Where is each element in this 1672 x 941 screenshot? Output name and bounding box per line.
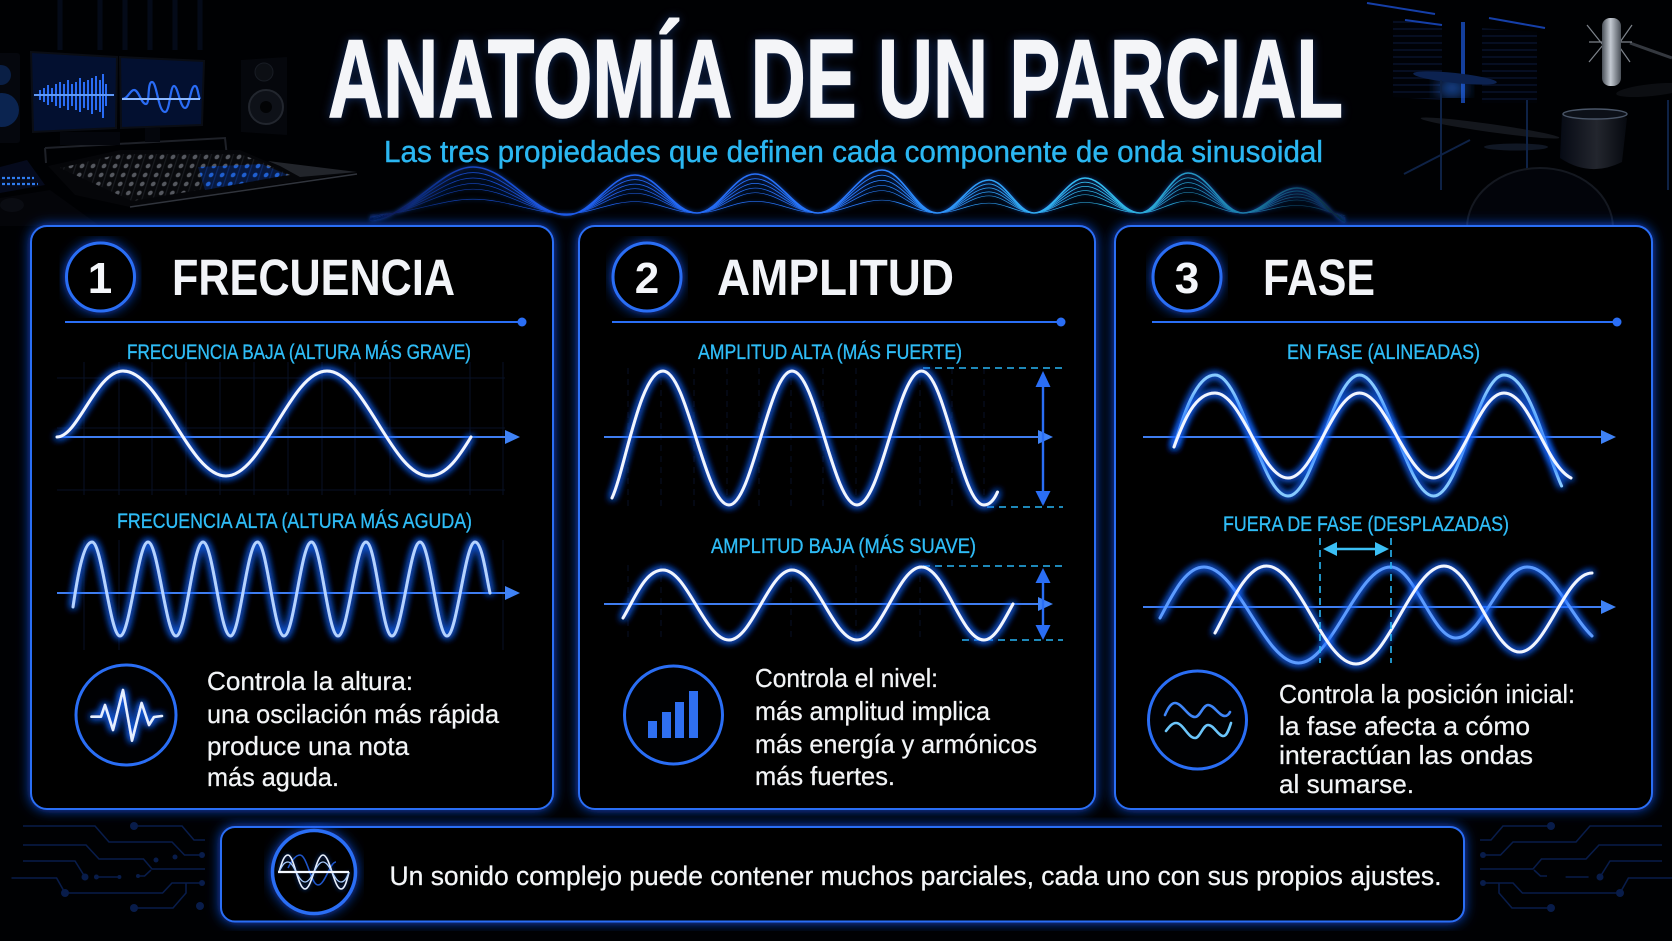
tom drum (1560, 109, 1627, 169)
description: Controla la altura: (207, 666, 413, 696)
number badge 3 (1153, 243, 1221, 311)
label: high amplitude: AMPLITUD ALTA (MÁS FUERTE) (698, 341, 962, 364)
description: la fase afecta a cómo (1279, 711, 1530, 741)
panel: fase (1115, 226, 1652, 809)
studio scene: mixing desk and monitors (0, 0, 357, 226)
icon: layered partials (272, 830, 356, 914)
description: más aguda. (207, 762, 339, 792)
cymbals (1404, 69, 1672, 190)
side controller (0, 160, 100, 226)
icon: pulse waveform (76, 665, 176, 765)
circuit decoration right (1480, 822, 1672, 912)
callout frame (221, 827, 1464, 922)
circuit decoration left (12, 822, 205, 912)
heading rule (1152, 318, 1622, 326)
monitor with waveform (31, 52, 117, 132)
panel frame (1115, 226, 1652, 809)
icon: left speaker (0, 53, 20, 143)
number badge 1 (66, 243, 134, 311)
chart: out-of-phase waves (1143, 538, 1616, 664)
label: low amplitude: AMPLITUD BAJA (MÁS SUAVE) (711, 535, 976, 558)
description: Controla el nivel: (755, 663, 938, 693)
wave ribbon behind the subtitle (370, 167, 1345, 222)
heading: AMPLITUD (717, 249, 954, 306)
chart: high amplitude wave (604, 368, 1063, 507)
arrow: amplitude range (1036, 568, 1050, 640)
label: out of phase: FUERA DE FASE (DESPLAZADAS) (1223, 513, 1509, 536)
description: una oscilación más rápida (207, 699, 500, 729)
description: más fuertes. (755, 761, 895, 791)
heading: FASE (1263, 249, 1375, 306)
panel frame (31, 226, 553, 809)
chart: low frequency wave (57, 371, 520, 476)
number badge 2: 2 (635, 254, 659, 303)
microphone (1587, 18, 1672, 86)
panel frame (579, 226, 1095, 809)
description: produce una nota (207, 731, 410, 761)
studio scene: drums and microphone (1367, 3, 1672, 288)
chart: high frequency wave (57, 542, 520, 636)
chart: in-phase waves (1143, 375, 1616, 496)
monitor with sine display (120, 57, 204, 128)
description: Controla la posición inicial: (1279, 679, 1575, 709)
description (755, 663, 1037, 791)
label: low frequency: FRECUENCIA BAJA (ALTURA MÁS GRAVE) (127, 341, 471, 364)
mixing console (48, 150, 357, 207)
icon: two offset waves (1148, 671, 1246, 769)
panel: frecuencia (31, 226, 553, 809)
label: high frequency: FRECUENCIA ALTA (ALTURA MÁS AGUDA) (117, 510, 472, 533)
description: interactúan las ondas (1279, 740, 1533, 770)
subtitle: Las tres propiedades que definen cada componente de onda sinusoidal (384, 134, 1323, 169)
number badge 3: 3 (1175, 254, 1199, 303)
icon: right speaker (241, 57, 287, 135)
chart: low amplitude wave (604, 566, 1063, 640)
heading rule (65, 318, 526, 326)
panel: amplitud (579, 226, 1095, 809)
number badge 1: 1 (88, 254, 112, 303)
window blinds (1367, 3, 1545, 103)
description: más energía y armónicos (755, 729, 1037, 759)
description (1279, 679, 1575, 799)
icon: level bars (624, 666, 722, 764)
kick drum (1467, 168, 1613, 288)
callout text: Un sonido complejo puede contener muchos parciales, cada uno con sus propios ajustes. (390, 861, 1442, 891)
bottom callout (221, 827, 1464, 922)
heading: FRECUENCIA (172, 249, 455, 306)
description: al sumarse. (1279, 769, 1414, 799)
description: más amplitud implica (755, 696, 991, 726)
heading rule (612, 318, 1066, 326)
description (207, 666, 500, 792)
arrow: amplitude range (1036, 371, 1050, 506)
arrow: phase shift (1323, 542, 1389, 556)
number badge 2 (613, 243, 681, 311)
label: in phase: EN FASE (ALINEADAS) (1287, 341, 1480, 364)
